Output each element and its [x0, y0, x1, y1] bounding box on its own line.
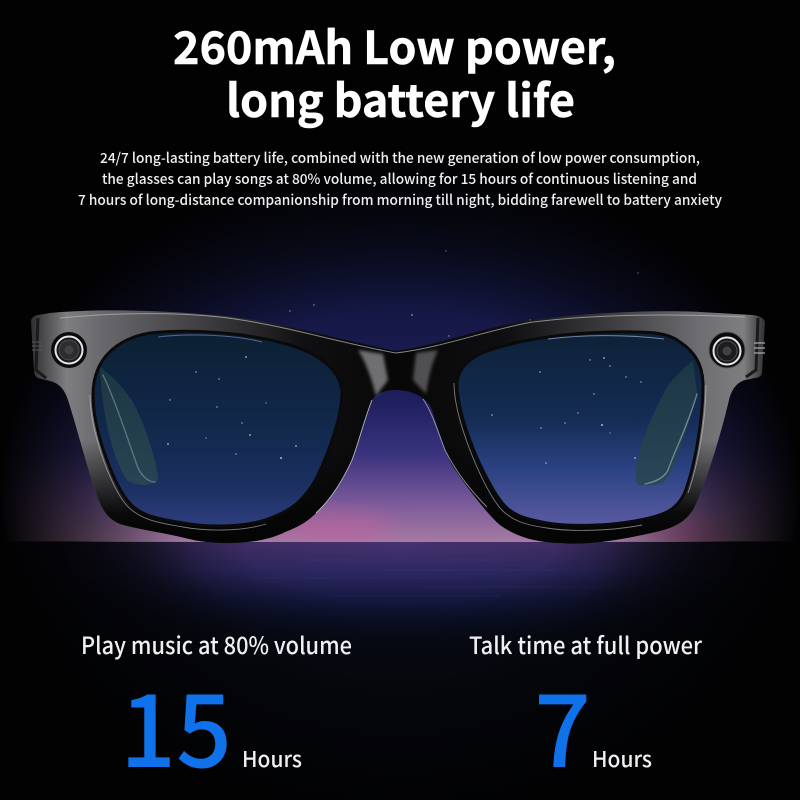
description text: 7 hours of long-distance companionship from morning till night, bidding farewell to battery anxiety	[78, 190, 722, 210]
description text: 24/7 long-lasting battery life, combined with the new generation of low power consumption,	[100, 148, 700, 168]
glasses	[31, 250, 765, 544]
frame left half	[31, 310, 396, 543]
left hinge	[32, 318, 46, 378]
stars	[167, 356, 642, 464]
frame lower shading	[82, 446, 716, 544]
title: long battery life	[226, 65, 575, 130]
right lens	[457, 332, 703, 525]
talk value: 7	[534, 651, 591, 797]
talk unit: Hours	[592, 742, 652, 774]
right hinge	[746, 318, 765, 377]
description text: the glasses can play songs at 80% volume, allowing for 15 hours of continuous listening and	[102, 169, 697, 189]
description text	[78, 148, 722, 210]
left lens	[93, 331, 342, 526]
right camera	[709, 332, 745, 368]
left temple arm seen through lens	[100, 367, 158, 485]
music unit: Hours	[242, 742, 302, 774]
music value: 15	[120, 651, 232, 797]
talk label: Talk time at full power	[469, 627, 702, 661]
bridge highlights	[358, 350, 438, 396]
title	[173, 12, 616, 130]
stat: talk time	[469, 627, 702, 797]
frame edge highlights	[60, 314, 745, 513]
music label: Play music at 80% volume	[81, 627, 352, 661]
temple arm highlights	[103, 375, 697, 484]
stat: music playback	[81, 627, 352, 797]
left camera	[51, 332, 87, 368]
frame right half	[396, 311, 765, 544]
title: 260mAh Low power,	[173, 12, 616, 77]
lens rim	[90, 331, 706, 530]
right temple arm seen through lens	[636, 360, 697, 485]
